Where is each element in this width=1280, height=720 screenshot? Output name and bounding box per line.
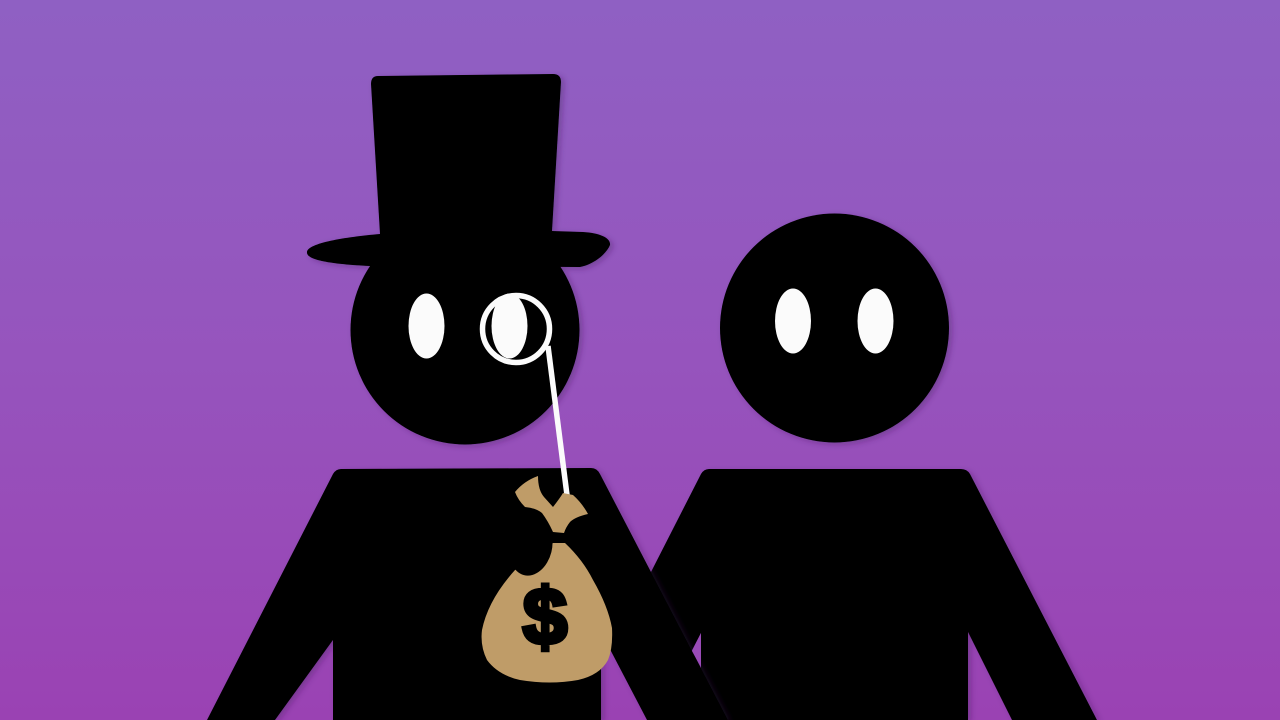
monocle ring (482, 296, 550, 362)
gap between the two figures (692, 633, 701, 667)
right person right eye (858, 288, 894, 354)
bag body (482, 543, 612, 682)
hand holding the bag (504, 514, 558, 580)
right person left eye (775, 288, 811, 354)
bag neck and ties (515, 476, 588, 533)
figure: left person (207, 74, 728, 720)
left person body (207, 468, 728, 720)
left person right eye (492, 294, 528, 358)
icon: monocle (482, 296, 567, 495)
dollar sign: $ (523, 572, 567, 661)
figure: right person (651, 214, 1097, 720)
monocle cord (548, 346, 567, 495)
left person head (350, 216, 580, 444)
icon: money bag (482, 476, 612, 682)
right person body (651, 469, 1097, 720)
left person left eye (408, 294, 444, 358)
right person head (720, 214, 949, 442)
top hat (307, 74, 610, 267)
